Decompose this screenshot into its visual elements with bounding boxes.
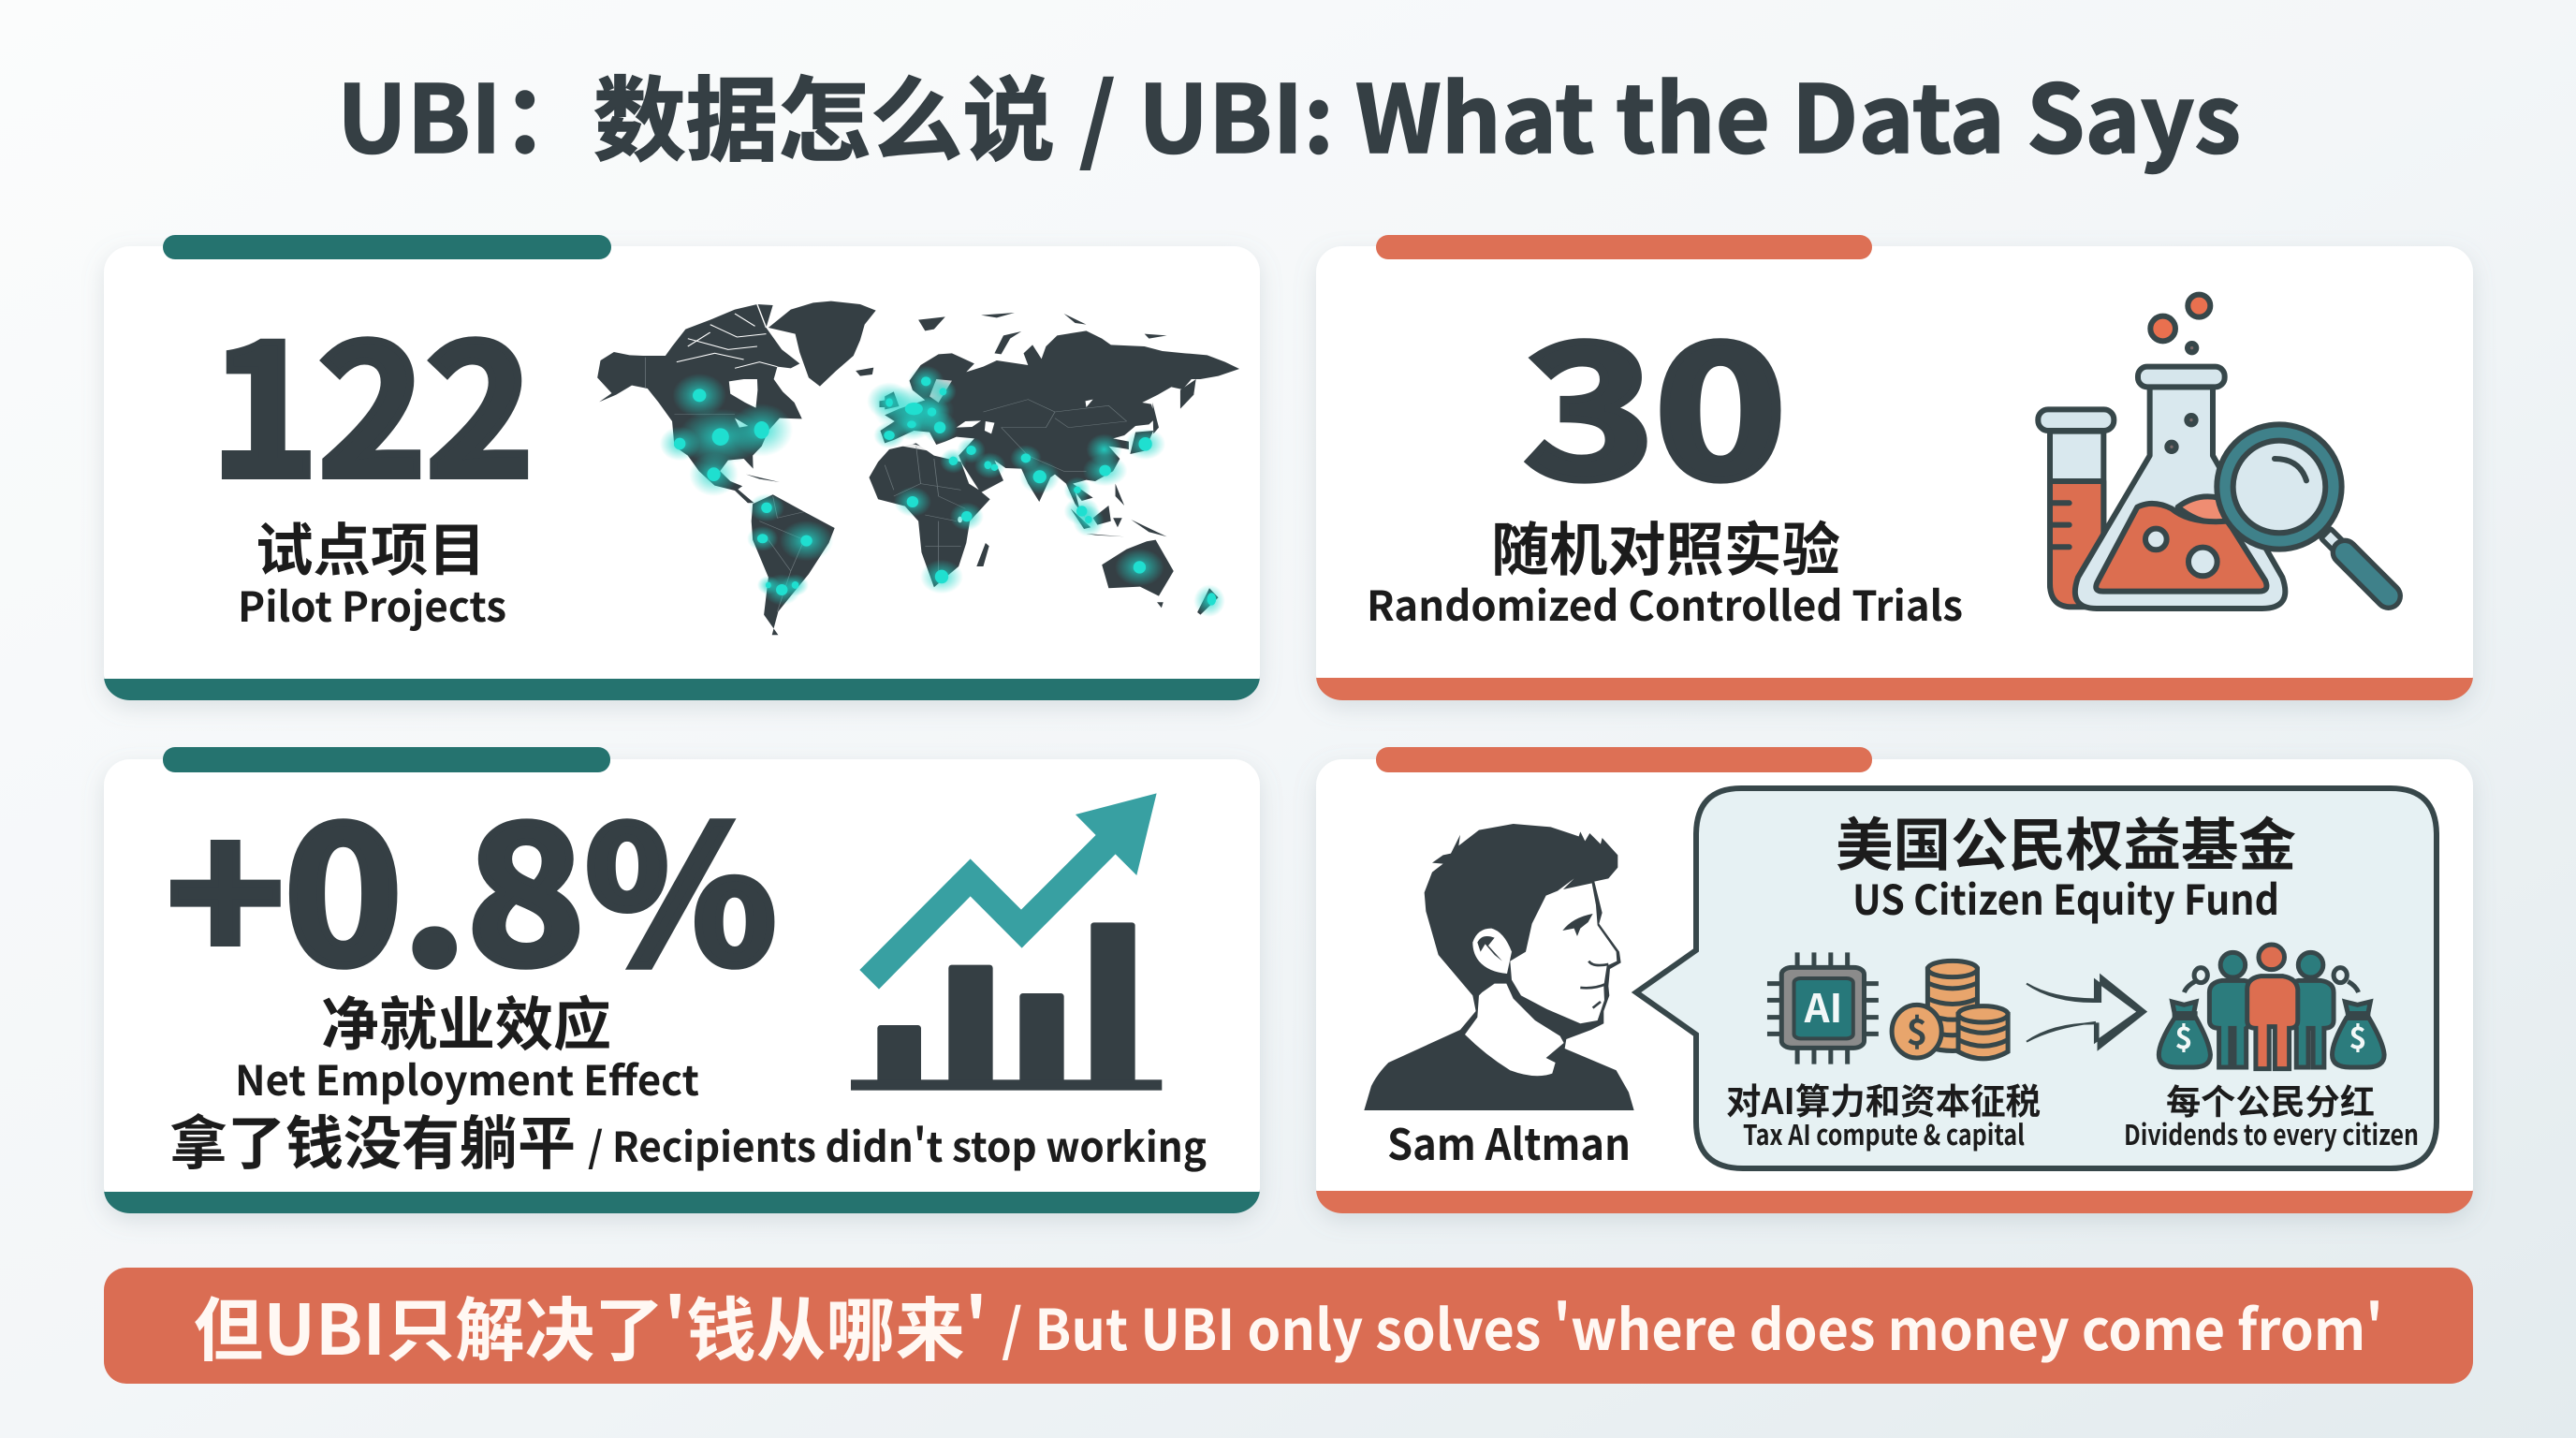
big number: 30: 30 [1524,270,1786,530]
panel: net employment effect [104,746,1260,1213]
note: recipients kept working: / Recipients didn't stop working [588,1114,1207,1174]
speech bubble [1636,788,2437,1168]
title: 数据怎么说 [593,47,1055,180]
banner: conclusion [104,1268,2473,1384]
label: RCT Chinese: 随机对照实验 [1491,503,1840,587]
note: recipients kept working [169,1096,1207,1181]
icon: rising arrow and bar chart [851,793,1162,1091]
icon: lab flasks and magnifier [2038,295,2389,609]
caption: dividends Chinese: 每个公民分红 [2166,1074,2375,1124]
icon: AI chip: AI [1804,977,1842,1034]
portrait: Sam Altman silhouette [1364,824,1634,1110]
label: net employment Chinese: 净就业效应 [321,977,611,1062]
icon: coin stacks [1892,961,2008,1059]
arrow [2027,976,2146,1049]
title: / [1079,44,1116,180]
panel: US citizen equity fund [1316,747,2473,1213]
title [337,44,2241,180]
banner: conclusion: 但UBI只解决了'钱从哪来' [194,1275,988,1375]
icon: citizens with money bags: $ [2349,1015,2366,1058]
title: UBI: What the Data Says [1138,44,2241,180]
title: UBI： [337,44,595,180]
name label: Sam Altman [1387,1111,1631,1173]
label: RCT English: Randomized Controlled Trials [1367,573,1963,633]
world map with glowing pilot locations [597,301,1239,635]
conical flask [2075,295,2285,609]
magnifier [2217,424,2389,596]
panel: randomized controlled trials [1316,235,2473,700]
big number: 122: 122 [211,268,534,528]
panel: pilot projects [104,235,1260,700]
caption: tax AI compute English: Tax AI compute & capital [1743,1112,2025,1153]
label: pilot projects English: Pilot Projects [238,574,506,634]
note: recipients kept working: 拿了钱没有躺平 [169,1096,576,1181]
fund heading English: US Citizen Equity Fund [1852,867,2279,927]
test tube [2038,409,2114,607]
caption: dividends English: Dividends to every citizen [2124,1112,2419,1153]
label: pilot projects Chinese: 试点项目 [256,504,486,587]
label: net employment English: Net Employment Effect [235,1048,699,1108]
big number: +0.8%: +0.8% [167,746,777,1018]
icon: AI chip [1767,952,1879,1064]
banner: conclusion: / But UBI only solves 'where does money come from' [1002,1285,2383,1367]
icon: citizens with money bags: $ [2175,1015,2192,1058]
fund heading Chinese: 美国公民权益基金 [1836,799,2296,882]
caption: tax AI compute Chinese: 对AI算力和资本征税 [1726,1073,2041,1124]
icon: coin stacks: $ [1907,1004,1927,1055]
icon: citizens with money bags [2159,945,2384,1069]
